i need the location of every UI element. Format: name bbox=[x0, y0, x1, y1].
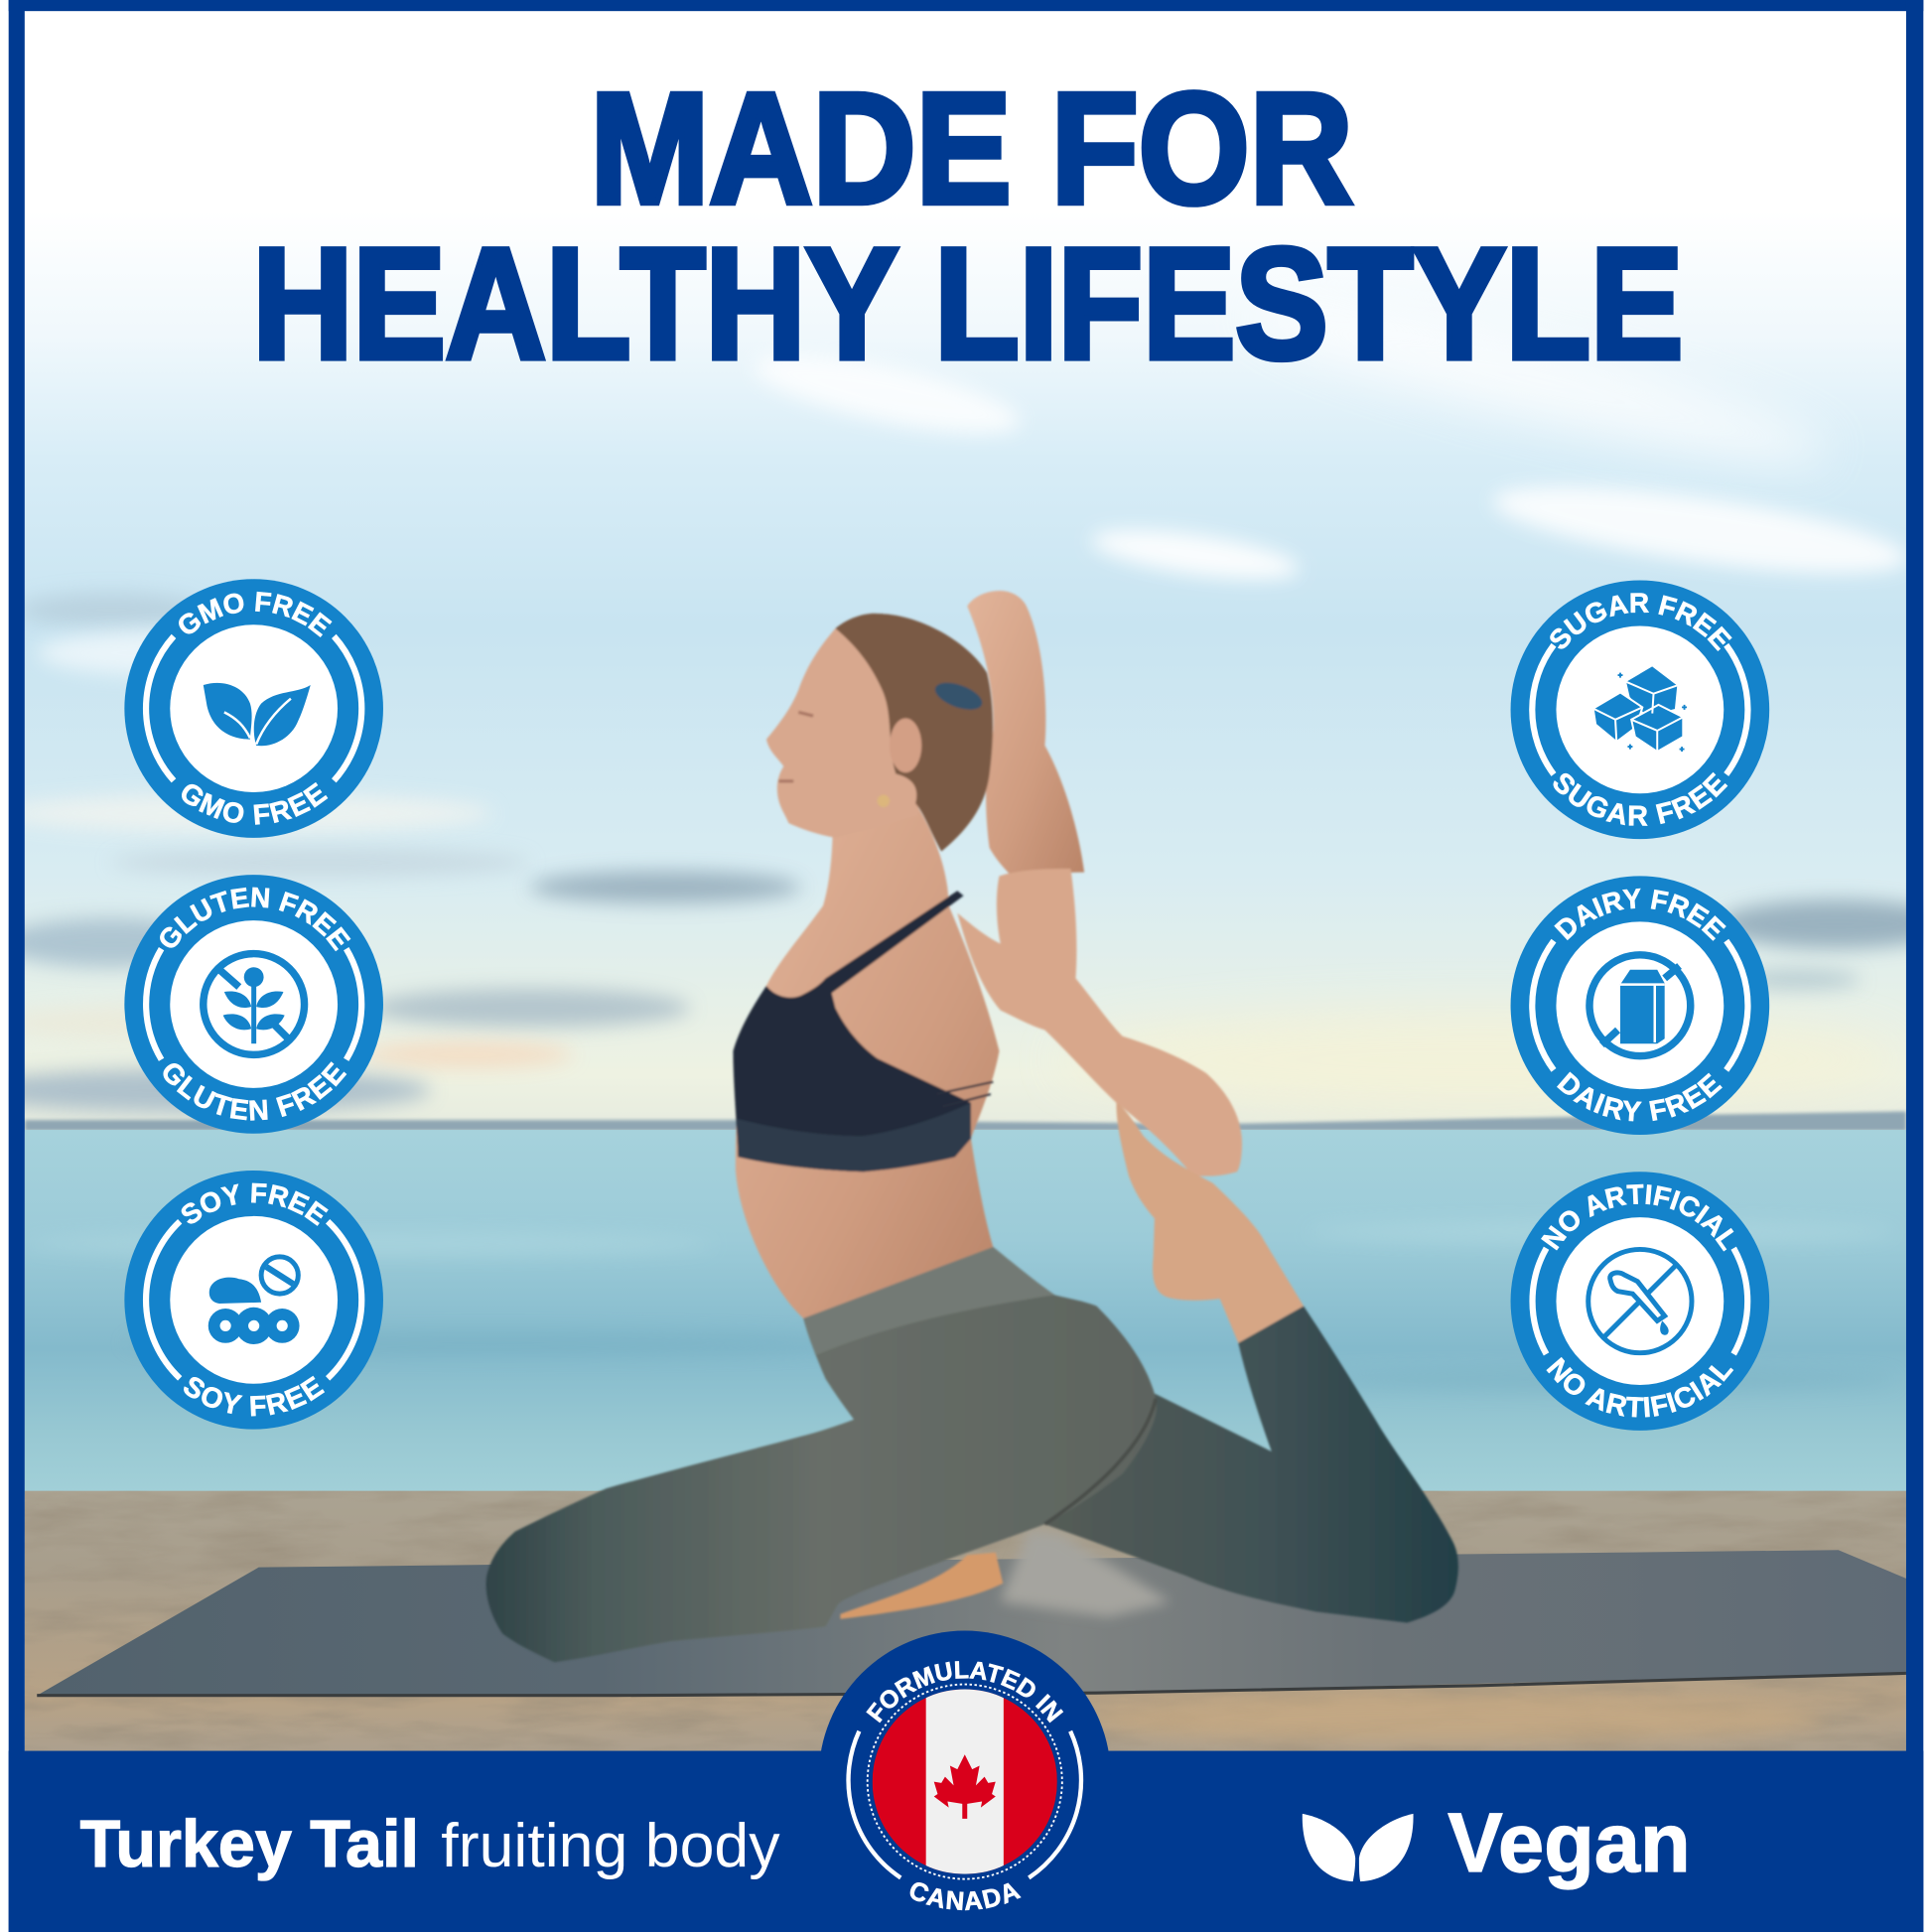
banner text: Turkey Tail fruiting body bbox=[80, 1807, 780, 1881]
waistband bbox=[803, 1247, 1054, 1355]
badge: soy free: SOY FREE bbox=[184, 1376, 326, 1416]
white side arcs bbox=[849, 1731, 1081, 1877]
dotted ring bbox=[868, 1685, 1062, 1879]
badge: GMO free: GMO FREE bbox=[182, 782, 328, 825]
mat highlight bbox=[1001, 1530, 1171, 1616]
woman in yoga pose bbox=[486, 591, 1458, 1662]
facial features bbox=[778, 712, 813, 781]
badge: GMO free: GMO FREE bbox=[179, 592, 332, 637]
lower arm and hand bbox=[957, 869, 1242, 1176]
distant shore bbox=[25, 1111, 1906, 1131]
badge: sugar free bbox=[1511, 580, 1769, 840]
Canadian flag bbox=[873, 1690, 1057, 1874]
icon: sugar cubes bbox=[1593, 665, 1687, 752]
badge: soy free: SOY FREE bbox=[181, 1183, 329, 1226]
sparkles bbox=[1618, 673, 1687, 752]
sea bbox=[25, 1130, 1906, 1494]
sea ripples bbox=[25, 1220, 1897, 1391]
hips and front leg leggings bbox=[486, 1247, 1157, 1662]
badge: sugar free: SUGAR FREE bbox=[1550, 593, 1732, 651]
icon: soy pods bbox=[208, 1257, 300, 1344]
badge: dairy free: DAIRY FREE bbox=[1557, 1072, 1723, 1122]
hair clip bbox=[931, 677, 986, 715]
maple leaf bbox=[934, 1754, 996, 1819]
banner text: Vegan: Vegan bbox=[1448, 1796, 1691, 1889]
earring bbox=[878, 794, 890, 807]
ear bbox=[890, 719, 921, 772]
banner text: Turkey Tail fruiting body: fruiting body bbox=[441, 1812, 780, 1880]
badge: gluten free: GLUTEN FREE bbox=[160, 888, 351, 951]
icon: crossed dropper bbox=[1588, 1249, 1692, 1353]
badge: sugar free: SUGAR FREE bbox=[1553, 772, 1727, 826]
badge: dairy free bbox=[1511, 876, 1769, 1135]
mat front edge bbox=[37, 1673, 1906, 1696]
torso and neck bbox=[736, 807, 1000, 1318]
face bbox=[766, 628, 924, 838]
badge: no artificial: NO ARTIFICIAL bbox=[1541, 1183, 1733, 1251]
stone texture bbox=[25, 1491, 1906, 1752]
sky bbox=[25, 10, 1906, 1131]
title bbox=[252, 60, 1683, 392]
icon: crossed wheat bbox=[204, 954, 305, 1054]
badge: no artificial: NO ARTIFICIAL bbox=[1547, 1356, 1733, 1418]
leg crease bbox=[1044, 1399, 1156, 1524]
badge disc bbox=[819, 1631, 1111, 1923]
badge: gluten free: GLUTEN FREE bbox=[163, 1061, 347, 1121]
badge: GMO free bbox=[124, 579, 383, 838]
stone ground bbox=[25, 1491, 1906, 1752]
icon: vegan leaves bbox=[1303, 1814, 1414, 1881]
warm foreground patch bbox=[1084, 1694, 1824, 1743]
hair bbox=[835, 614, 993, 852]
icon: crossed milk carton bbox=[1589, 955, 1691, 1056]
title: MADE FOR bbox=[590, 60, 1353, 236]
sports bra bbox=[733, 891, 971, 1172]
badge: dairy free: DAIRY FREE bbox=[1554, 888, 1726, 941]
icon: leaves bbox=[204, 683, 311, 746]
clouds bbox=[0, 275, 1932, 1113]
title: HEALTHY LIFESTYLE bbox=[252, 215, 1683, 392]
badge: gluten free bbox=[124, 875, 383, 1134]
badge: no artificial bbox=[1511, 1172, 1769, 1431]
tucked foot bbox=[840, 1553, 1003, 1619]
back leg leggings bbox=[1044, 1307, 1458, 1622]
bottom banner bbox=[9, 1751, 1923, 1932]
badge: formulated in Canada bbox=[821, 1630, 1108, 1910]
yoga mat bbox=[37, 1550, 1906, 1696]
badge: soy free bbox=[124, 1171, 383, 1430]
banner text: Turkey Tail fruiting body: Turkey Tail bbox=[80, 1807, 419, 1881]
bra band bbox=[737, 1103, 971, 1172]
raised foot bbox=[1116, 1103, 1304, 1343]
raised arm and hand bbox=[967, 591, 1084, 878]
badge text top: FORMULATED IN bbox=[866, 1661, 1064, 1724]
badge text bottom: CANADA bbox=[909, 1882, 1022, 1910]
back straps bbox=[936, 1082, 993, 1106]
